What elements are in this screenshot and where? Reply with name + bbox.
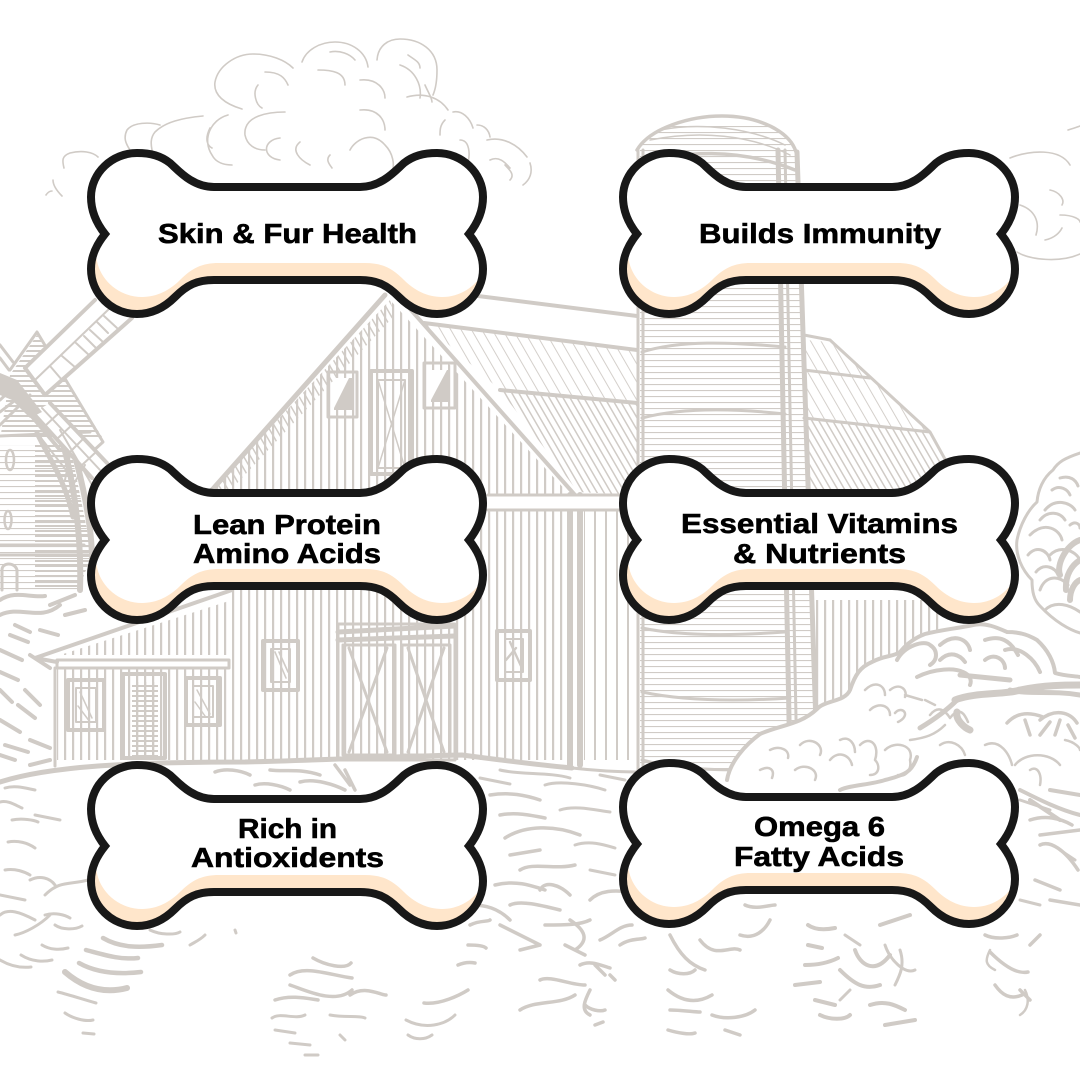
illustration: bushes xyxy=(727,453,1080,820)
illustration: ground lines xyxy=(0,595,640,790)
illustration: right barn section xyxy=(804,335,962,720)
bone card: Lean Protein Amino Acids xyxy=(87,442,488,620)
illustration: side shed xyxy=(35,590,232,766)
bone card: Lean Protein Amino Acids: Lean Protein xyxy=(193,509,381,540)
bone card: Lean Protein Amino Acids: Amino Acids xyxy=(193,538,381,569)
bone card: Skin & Fur Health: Skin & Fur Health xyxy=(158,218,417,249)
illustration: barn roof behind silo xyxy=(395,292,637,495)
illustration: silo xyxy=(630,100,825,780)
bone card: Essential Vitamins & Nutrients: & Nutrients xyxy=(733,538,906,569)
bone card: Rich in Antioxidents xyxy=(87,748,488,926)
barn lower windows and doors xyxy=(263,624,530,760)
illustration: barn front xyxy=(212,295,640,765)
bone card: Essential Vitamins & Nutrients: Essential Vitamins xyxy=(681,508,958,539)
bone card: Omega 6 Fatty Acids: Omega 6 xyxy=(754,811,885,842)
bone card: Builds Immunity xyxy=(619,136,1020,314)
bone card: Omega 6 Fatty Acids: Fatty Acids xyxy=(734,841,904,872)
bone card: Rich in Antioxidents: Antioxidents xyxy=(191,842,384,873)
bone card: Rich in Antioxidents: Rich in xyxy=(238,813,337,844)
illustration: field furrows xyxy=(0,770,1080,1055)
bone card: Omega 6 Fatty Acids xyxy=(619,746,1020,924)
windmill sails xyxy=(0,300,132,517)
illustration: windmill xyxy=(0,300,132,590)
bone card: Essential Vitamins & Nutrients xyxy=(619,442,1020,620)
bone card: Skin & Fur Health xyxy=(87,136,488,314)
bone card: Builds Immunity: Builds Immunity xyxy=(699,218,941,249)
tree on the right edge xyxy=(1017,453,1080,633)
illustration: clouds xyxy=(46,39,1080,260)
barn gable windows xyxy=(328,363,455,474)
